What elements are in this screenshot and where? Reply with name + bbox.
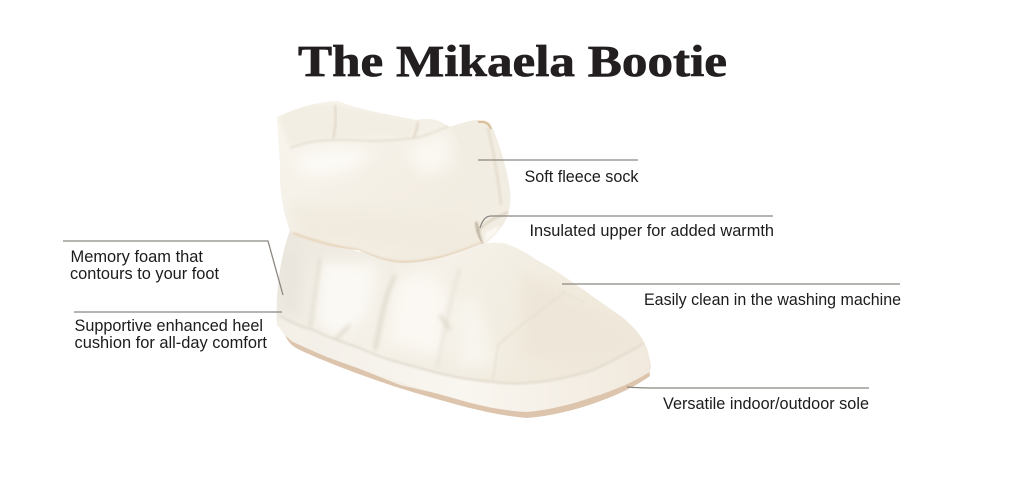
callout: memory foam: Memory foam that	[70, 248, 203, 266]
cuff front	[277, 101, 482, 263]
lower body of bootie	[277, 230, 650, 408]
callout: heel cushion: cushion for all-day comfort	[74, 334, 267, 352]
callout: soft fleece sock: Soft fleece sock	[524, 168, 639, 186]
illustration: bootie	[277, 101, 651, 418]
callout: heel cushion	[74, 312, 282, 352]
sole tread	[285, 330, 650, 418]
title: The Mikaela Bootie	[298, 37, 727, 86]
back flap of cuff	[448, 120, 510, 246]
callout: insulated upper	[480, 216, 774, 240]
callout: memory foam: contours to your foot	[70, 265, 219, 283]
callout: indoor/outdoor sole: Versatile indoor/outdoor sole	[663, 395, 869, 413]
callout: memory foam	[63, 241, 283, 295]
callout: heel cushion: Supportive enhanced heel	[74, 317, 263, 335]
callout: insulated upper: Insulated upper for added warmth	[530, 222, 774, 240]
sole rim	[278, 316, 651, 412]
callout: washing machine: Easily clean in the washing machine	[644, 291, 901, 309]
